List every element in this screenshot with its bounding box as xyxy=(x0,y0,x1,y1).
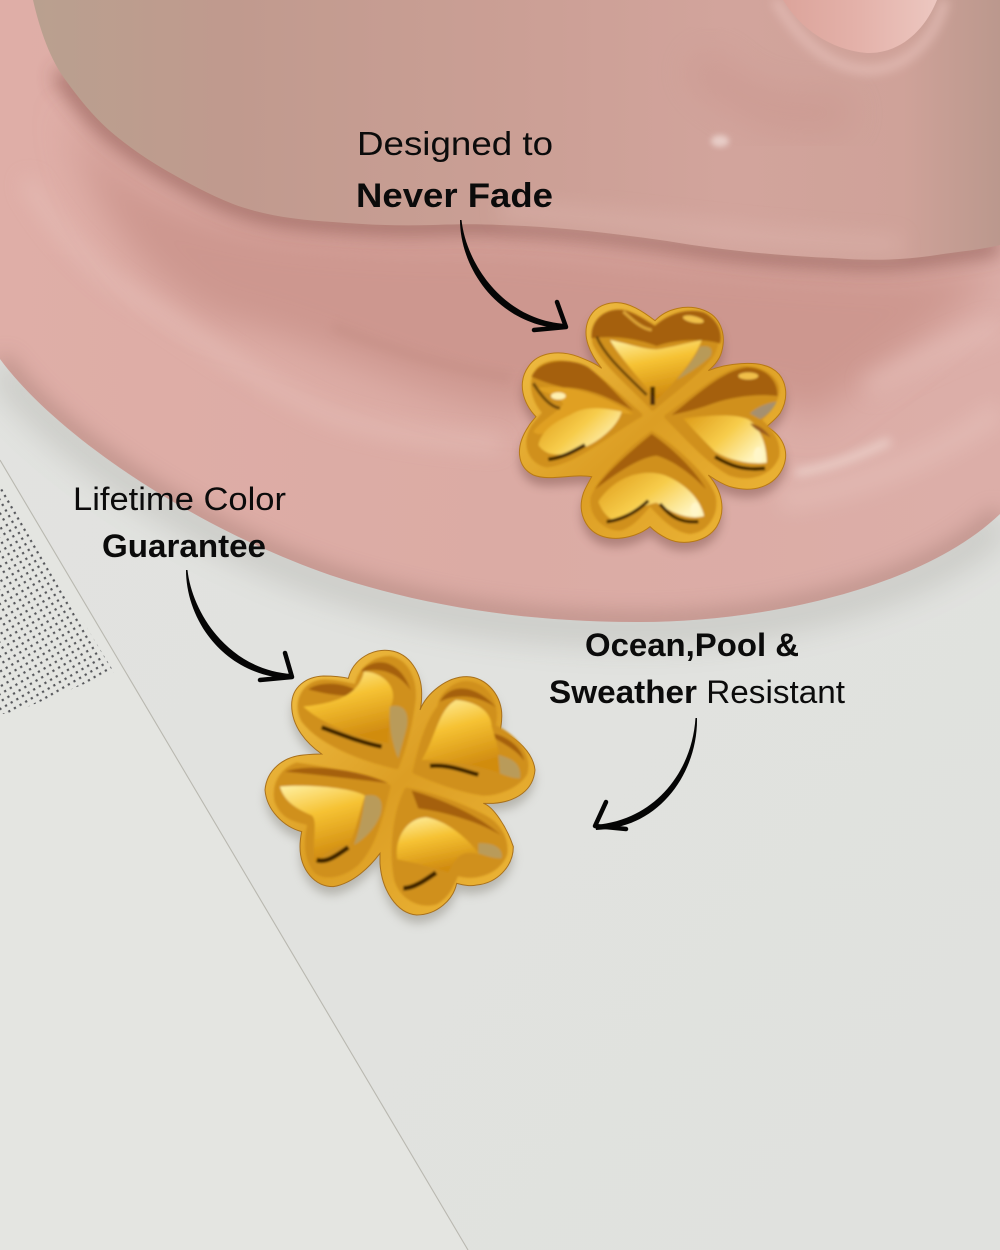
callout: Ocean, Pool & Sweather Resistant: Sweather Resistant xyxy=(549,674,845,710)
tray lower edge shade xyxy=(0,359,1000,622)
left heart xyxy=(529,361,640,465)
vase opening xyxy=(783,0,937,53)
callout: Designed to Never Fade xyxy=(356,125,553,215)
paper sheet xyxy=(0,460,468,1250)
upper-left heart xyxy=(300,658,414,767)
clover base and rim xyxy=(519,303,786,542)
callout: Designed to Never Fade: Designed to xyxy=(357,125,553,162)
vase glint xyxy=(711,135,729,147)
dotted print on paper xyxy=(0,485,114,714)
upper-right heart xyxy=(415,683,526,793)
bottom heart xyxy=(593,433,714,532)
arrow: to upper clover xyxy=(460,220,567,330)
tray dish hollow xyxy=(82,146,982,419)
lower-right heart xyxy=(394,790,505,903)
callout: Lifetime Color Guarantee: Lifetime Color xyxy=(73,481,286,517)
tray rim highlights xyxy=(27,180,500,445)
callout: Ocean, Pool & Sweather Resistant xyxy=(549,627,845,710)
callout: Ocean, Pool & Sweather Resistant: Ocean,Pool & xyxy=(585,627,799,663)
callout: Designed to Never Fade: Never Fade xyxy=(356,177,553,215)
right heart xyxy=(667,367,777,476)
clover base and rim xyxy=(265,650,535,915)
top heart xyxy=(592,310,721,408)
tray shadow on surface xyxy=(0,365,1000,628)
vase cast shadow xyxy=(60,72,1000,260)
earring: lower clover xyxy=(265,650,535,923)
callout: Lifetime Color Guarantee: Guarantee xyxy=(102,528,266,564)
callout: Lifetime Color Guarantee xyxy=(73,481,286,564)
pink tray xyxy=(0,0,1000,622)
lower-left heart xyxy=(276,765,388,875)
pink vase xyxy=(33,0,1000,260)
earring: upper clover xyxy=(519,303,786,551)
arrow: to right of lower clover xyxy=(595,718,697,830)
arrow: to lower clover xyxy=(186,570,293,680)
